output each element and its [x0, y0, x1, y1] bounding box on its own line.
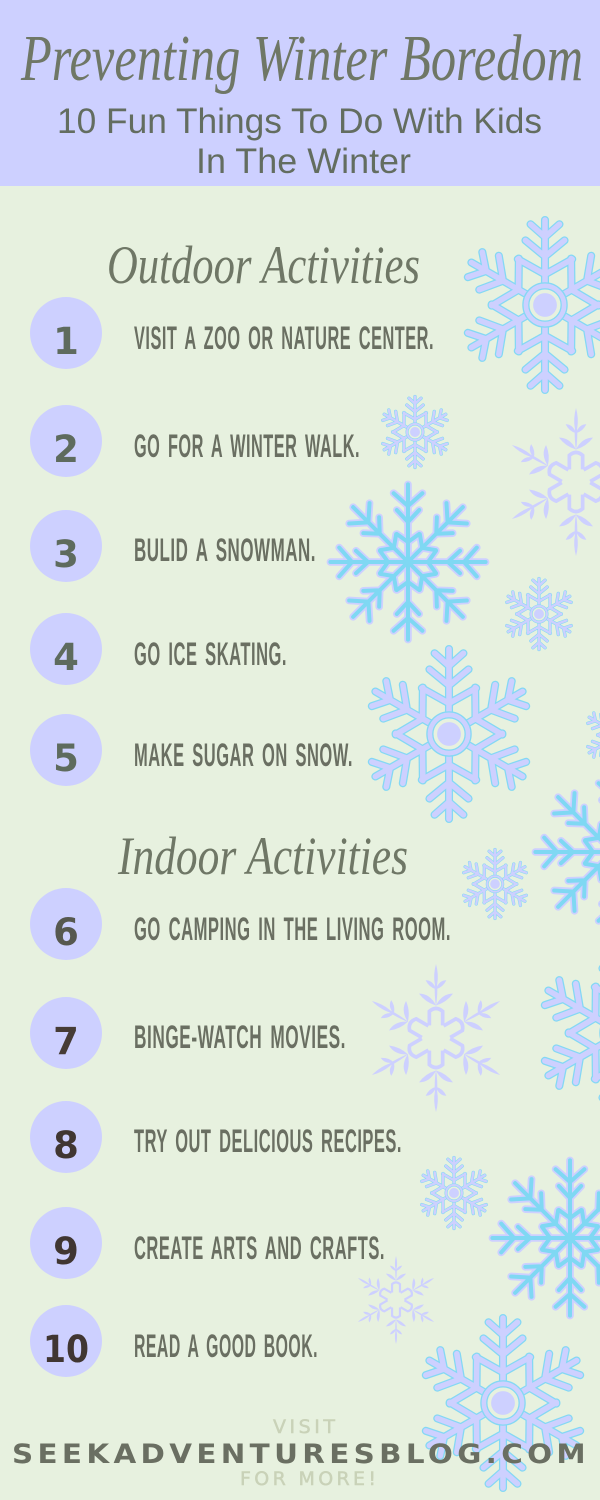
heading: indoor activities: Indoor Activities — [117, 826, 408, 886]
text: READ A GOOD BOOK. — [134, 1328, 318, 1364]
snowflake: small near item 8 — [418, 1158, 490, 1228]
snowflake decorations — [330, 220, 600, 1488]
snowflake: small near item 6 — [460, 850, 530, 918]
item 9 — [30, 1207, 385, 1279]
snowflake: blue centre — [330, 484, 486, 640]
item 1: 1 — [53, 320, 79, 363]
item 3: 3 — [53, 533, 79, 576]
snowflake: blue clipped right — [535, 774, 600, 930]
snowflake: pale right — [503, 408, 600, 556]
subtitle line 2: In The Winter — [196, 142, 411, 181]
item 2: GO FOR A WINTER WALK. — [134, 428, 360, 464]
snowflake: pale small — [353, 1256, 439, 1344]
item 6: 6 — [53, 911, 79, 954]
item 4: 4 — [53, 636, 79, 679]
item 4: GO ICE SKATING. — [134, 636, 287, 672]
item 6 — [30, 888, 451, 960]
item 10: 10 — [43, 1328, 89, 1371]
snowflake: large bottom — [416, 1318, 590, 1488]
snowflake: pale centre — [363, 964, 509, 1112]
item 8 — [30, 1101, 402, 1173]
item 3: BULID A SNOWMAN. — [134, 532, 316, 568]
snowflake: large clipped right — [535, 948, 600, 1118]
visit label: VISIT — [273, 1416, 335, 1438]
header panel — [0, 0, 600, 186]
item 7: 7 — [53, 1020, 79, 1063]
subtitle line 1: 10 Fun Things To Do With Kids — [57, 102, 542, 141]
item 3 — [30, 510, 316, 582]
for more label: FOR MORE! — [240, 1468, 376, 1490]
snowflake: small right — [503, 578, 575, 650]
item 1 — [30, 297, 434, 369]
footer call to action — [12, 1416, 590, 1490]
heading: outdoor activities: Outdoor Activities — [107, 235, 420, 295]
item 7: BINGE-WATCH MOVIES. — [134, 1019, 346, 1055]
snowflake: blue lower right — [492, 1160, 600, 1316]
item 10 — [30, 1305, 318, 1377]
item 2 — [30, 405, 360, 477]
snowflake: small clipped right — [584, 700, 600, 770]
snowflake: top right large — [458, 220, 600, 390]
item 5: 5 — [53, 737, 79, 780]
item 2: 2 — [53, 428, 79, 471]
snowflake: small near item 2 — [379, 396, 451, 468]
item 8: 8 — [53, 1124, 79, 1167]
item 5: MAKE SUGAR ON SNOW. — [134, 737, 353, 773]
website address: SEEKADVENTURESBLOG.COM — [12, 1439, 590, 1470]
item 9: 9 — [53, 1230, 79, 1273]
item 4 — [30, 613, 287, 685]
item 7 — [30, 997, 346, 1069]
snowflake: large centre — [362, 649, 536, 819]
item 5 — [30, 714, 353, 786]
